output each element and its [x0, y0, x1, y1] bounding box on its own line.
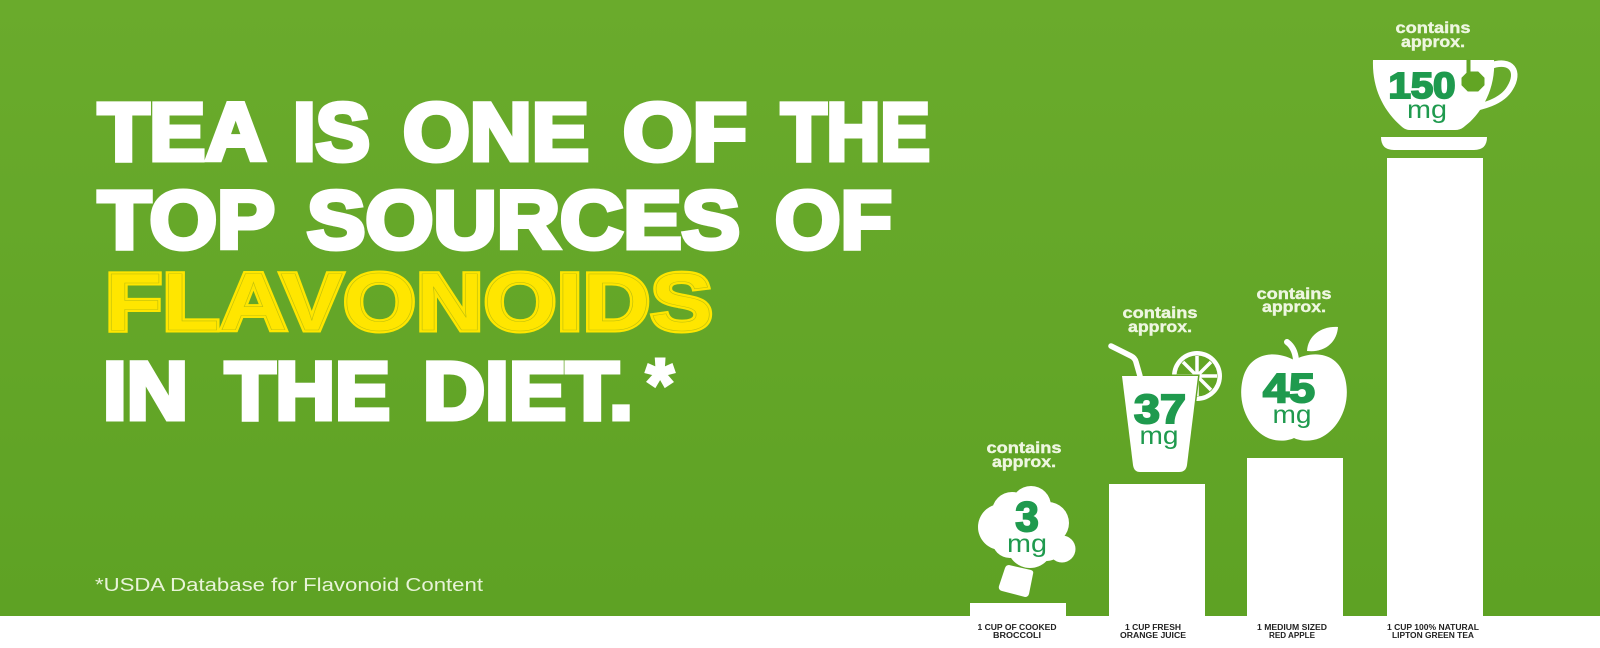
caption: 1 CUP 100% NATURAL	[1387, 623, 1479, 632]
headline line 4: IN	[103, 346, 188, 437]
caption: 1 CUP FRESH	[1125, 623, 1181, 632]
headline line 1: OF	[623, 87, 747, 178]
headline line 4: DIET.	[423, 346, 633, 437]
value 150 mg: mg	[1407, 96, 1447, 124]
contains label	[986, 440, 1062, 471]
headline line 2: SOURCES	[307, 175, 740, 266]
headline line 3: flavonoids: FLAVONOIDS	[105, 257, 713, 348]
headline line 2: OF	[775, 175, 892, 266]
contains label: approx.	[1128, 319, 1192, 336]
bar: juice	[1109, 484, 1205, 616]
caption	[1257, 623, 1327, 640]
contains label: contains	[1122, 305, 1198, 322]
caption	[1387, 623, 1479, 640]
column: apple	[1241, 286, 1347, 640]
contains label: contains	[986, 440, 1062, 457]
contains label	[1122, 305, 1198, 336]
contains label: approx.	[1401, 34, 1465, 51]
headline line 1: ONE	[403, 87, 589, 178]
bar: broccoli	[970, 603, 1066, 616]
icon: citrus slice	[1172, 351, 1222, 401]
bar: tea	[1387, 158, 1483, 616]
contains label	[1256, 286, 1332, 316]
column: orange juice	[1109, 305, 1222, 640]
headline	[98, 87, 930, 437]
caption: RED APPLE	[1269, 631, 1316, 640]
white base band	[0, 616, 1600, 648]
caption: 1 CUP OF COOKED	[978, 623, 1057, 632]
caption: ORANGE JUICE	[1120, 631, 1187, 640]
caption: BROCCOLI	[993, 631, 1041, 640]
value 3 mg	[1007, 493, 1047, 558]
caption: LIPTON GREEN TEA	[1392, 631, 1474, 640]
value 3 mg: mg	[1007, 530, 1047, 558]
headline line 1: THE	[781, 87, 930, 178]
caption	[978, 623, 1057, 640]
caption: 1 MEDIUM SIZED	[1257, 623, 1327, 632]
headline line 2: TOP	[98, 175, 275, 266]
icon: tea cup	[1373, 60, 1514, 150]
contains label: approx.	[992, 454, 1056, 471]
value 37 mg: 37	[1134, 386, 1186, 432]
headline line 4: THE	[225, 346, 390, 437]
contains label: contains	[1256, 286, 1332, 303]
value 45 mg: 45	[1263, 365, 1315, 411]
bar: apple	[1247, 458, 1343, 616]
contains label: approx.	[1262, 299, 1326, 316]
value 45 mg	[1263, 365, 1315, 429]
contains label: contains	[1396, 20, 1470, 37]
caption	[1120, 623, 1187, 640]
headline line 2	[98, 175, 892, 266]
contains label	[1396, 20, 1470, 51]
value 45 mg: mg	[1272, 401, 1312, 429]
headline line 1: TEA	[98, 87, 266, 178]
value 3 mg: 3	[1015, 493, 1039, 540]
value 150 mg	[1388, 65, 1456, 124]
icon: juice glass	[1122, 376, 1198, 472]
asterisk: *	[646, 345, 674, 425]
value 37 mg: mg	[1140, 422, 1178, 450]
column: green tea	[1373, 20, 1514, 640]
headline line 4	[103, 346, 633, 437]
footnote: *USDA Database for Flavonoid Content	[95, 575, 483, 595]
headline line 1	[98, 87, 930, 178]
icon: apple	[1241, 327, 1347, 441]
column: broccoli	[970, 440, 1076, 640]
headline line 3: flavonoids: FLAVONOIDS	[105, 257, 713, 348]
icon: broccoli	[978, 486, 1076, 597]
value 150 mg: 150	[1388, 65, 1456, 106]
value 37 mg	[1134, 386, 1186, 450]
icon: straw	[1111, 346, 1140, 376]
headline line 1: IS	[293, 87, 370, 178]
